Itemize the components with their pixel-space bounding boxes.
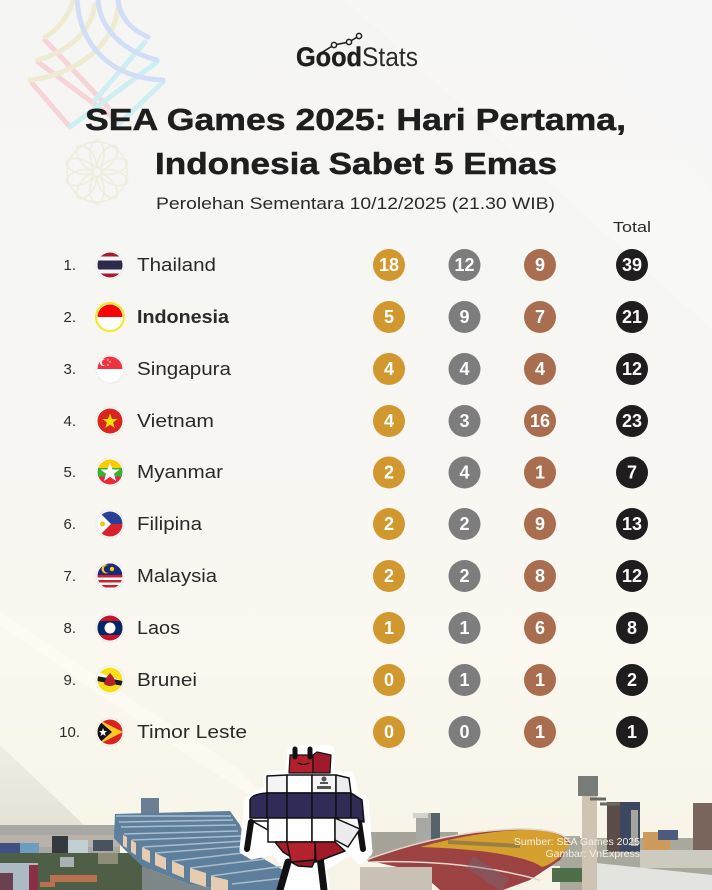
mascot white outline xyxy=(244,750,368,890)
stadium skyline photo xyxy=(0,776,712,890)
row: Malaysia: 2 xyxy=(459,566,470,586)
arms xyxy=(247,815,363,849)
row: Thailand: 1. xyxy=(63,257,76,274)
row: Vietnam: Vietnam xyxy=(137,411,214,431)
row: Laos: 6 xyxy=(535,618,545,638)
logo: GoodStats: Good xyxy=(296,42,362,72)
row: Thailand: 39 xyxy=(622,255,642,275)
row: Singapura: 3. xyxy=(63,361,76,378)
row: Indonesia xyxy=(63,301,648,333)
logo: GoodStats: Stats xyxy=(362,42,418,72)
row: Brunei: Brunei xyxy=(137,670,197,690)
row: Vietnam: 4. xyxy=(63,413,76,430)
red band xyxy=(275,842,345,867)
row: Malaysia: 12 xyxy=(622,566,642,586)
row: Singapura: 4 xyxy=(535,359,545,379)
row: Malaysia: 2 xyxy=(384,566,394,586)
row: Myanmar: 4 xyxy=(459,462,470,482)
blue band xyxy=(250,793,364,822)
row: Laos: 8. xyxy=(63,620,76,637)
flag: Timor Leste xyxy=(96,718,124,746)
row: Filipina xyxy=(63,508,648,540)
floodlight tower xyxy=(578,776,620,890)
row: Singapura: 12 xyxy=(622,359,642,379)
row: Brunei xyxy=(63,664,648,696)
row: Myanmar: Myanmar xyxy=(137,462,223,482)
row: Indonesia: 7 xyxy=(535,307,545,327)
left stadium xyxy=(114,798,318,890)
row: Indonesia: 2. xyxy=(63,309,76,326)
row: Indonesia: 21 xyxy=(622,307,642,327)
head xyxy=(289,752,331,773)
white lower band xyxy=(252,818,360,847)
row: Thailand: 12 xyxy=(454,255,475,275)
row: Brunei: 2 xyxy=(627,670,637,690)
watermark: flower emblem xyxy=(64,140,130,204)
flag: Brunei xyxy=(96,666,124,694)
flag: Indonesia xyxy=(96,303,124,331)
flag: Thailand xyxy=(96,251,124,279)
beige wall xyxy=(360,867,432,890)
row: Malaysia: Malaysia xyxy=(137,566,218,586)
eyes xyxy=(295,749,310,757)
row: Timor Leste: 1 xyxy=(627,722,637,742)
row: Myanmar xyxy=(63,456,648,488)
row: Thailand: Thailand xyxy=(137,255,216,275)
row: Myanmar: 5. xyxy=(63,464,76,481)
row: Filipina: 13 xyxy=(622,514,642,534)
row: Timor Leste: 0 xyxy=(459,722,470,742)
row: Thailand: 9 xyxy=(535,255,545,275)
left city xyxy=(0,825,150,890)
row: Singapura xyxy=(63,353,648,385)
row: Vietnam: 16 xyxy=(530,411,550,431)
flag: Singapore xyxy=(96,355,124,383)
row: Timor Leste xyxy=(59,716,648,748)
smile xyxy=(298,763,309,764)
row: Singapura: Singapura xyxy=(137,359,232,379)
row: Filipina: 2 xyxy=(459,514,470,534)
row: Myanmar: 7 xyxy=(627,462,637,482)
flag: Vietnam xyxy=(96,407,124,435)
row: Malaysia: 8 xyxy=(535,566,545,586)
row: Indonesia: 5 xyxy=(384,307,394,327)
row: Filipina: Filipina xyxy=(137,514,203,534)
logo: GoodStats xyxy=(296,33,418,72)
row: Timor Leste: 10. xyxy=(59,724,80,741)
row: Vietnam: 4 xyxy=(384,411,394,431)
column header: total: Total xyxy=(613,220,651,236)
source credit: Sumber: SEA Games 2025 xyxy=(514,836,640,848)
title: Indonesia Sabet 5 Emas xyxy=(155,146,557,181)
watermark: SEA Games logo xyxy=(30,0,163,127)
row: Filipina: 6. xyxy=(63,516,76,533)
emblem on chest xyxy=(317,776,331,789)
flag: Philippines xyxy=(96,510,124,538)
row: Indonesia: 9 xyxy=(459,307,470,327)
subtitle: Perolehan Sementara 10/12/2025 (21.30 WIB) xyxy=(156,194,555,213)
row: Singapura: 4 xyxy=(459,359,470,379)
row: Laos xyxy=(63,612,648,644)
legs xyxy=(280,857,324,890)
row: Filipina: 2 xyxy=(384,514,394,534)
row: Thailand xyxy=(63,249,648,281)
row: Vietnam xyxy=(63,405,648,437)
mascot xyxy=(244,749,368,890)
row: Timor Leste: 0 xyxy=(384,722,394,742)
title xyxy=(85,102,626,181)
flag: Malaysia xyxy=(96,562,124,590)
row: Malaysia: 7. xyxy=(63,568,76,585)
row: Timor Leste: 1 xyxy=(535,722,545,742)
source credit: Gambar: VnExpress xyxy=(545,848,640,860)
white building right xyxy=(596,863,712,890)
row: Laos: 8 xyxy=(627,618,637,638)
row: Singapura: 4 xyxy=(384,359,394,379)
source credit xyxy=(514,836,640,860)
row: Brunei: 1 xyxy=(535,670,545,690)
right stadium seating xyxy=(366,829,570,890)
row: Filipina: 9 xyxy=(535,514,545,534)
row: Indonesia: Indonesia xyxy=(137,307,230,327)
row: Malaysia xyxy=(63,560,648,592)
white upper band xyxy=(267,775,351,793)
row: Vietnam: 23 xyxy=(622,411,642,431)
row: Laos: 1 xyxy=(459,618,470,638)
flag: Myanmar xyxy=(96,458,124,486)
row: Brunei: 1 xyxy=(459,670,470,690)
row: Myanmar: 2 xyxy=(384,462,394,482)
right background buildings xyxy=(368,802,712,890)
row: Laos: 1 xyxy=(384,618,394,638)
flag: Laos xyxy=(96,614,124,642)
row: Timor Leste: Timor Leste xyxy=(137,722,247,742)
row: Thailand: 18 xyxy=(379,255,399,275)
row: Vietnam: 3 xyxy=(459,411,470,431)
row: Brunei: 9. xyxy=(63,672,76,689)
row: Myanmar: 1 xyxy=(535,462,545,482)
title: SEA Games 2025: Hari Pertama, xyxy=(85,102,626,137)
row: Laos: Laos xyxy=(137,618,180,638)
row: Brunei: 0 xyxy=(384,670,394,690)
